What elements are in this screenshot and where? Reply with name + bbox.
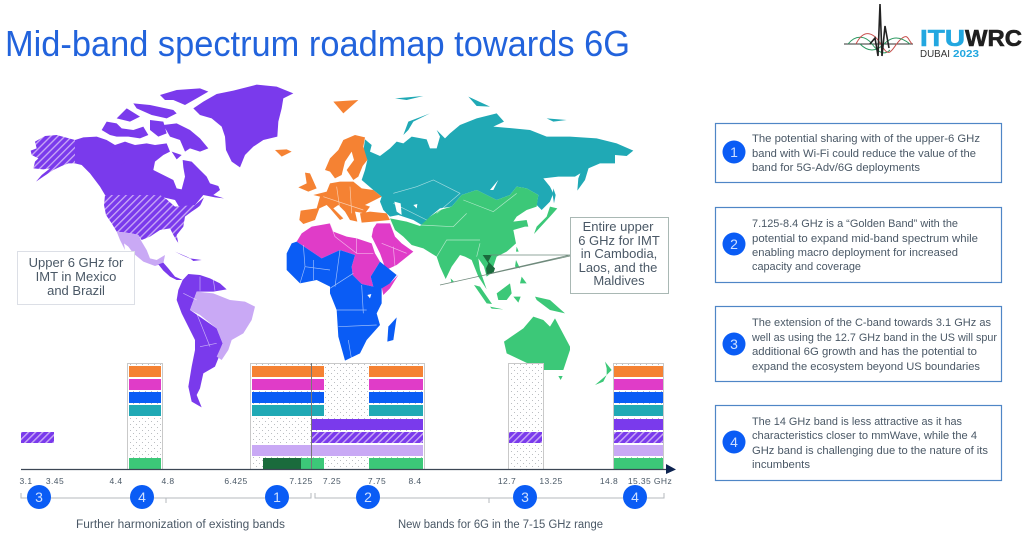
panel: note 2: 2	[730, 236, 738, 252]
Europe	[299, 182, 382, 224]
Central America and Caribbean	[158, 252, 202, 280]
callout: Mexico and Brazil: and Brazil	[47, 283, 105, 298]
panel: note 2: 7.125-8.4 GHz is a “Golden Band” with the	[752, 218, 958, 230]
title: Mid-band spectrum roadmap towards 6G	[5, 23, 630, 64]
spectrum chart	[19, 363, 676, 531]
Greenland	[193, 85, 293, 167]
panel: note 4: 4	[730, 434, 738, 450]
number badges	[27, 485, 647, 509]
range captions	[76, 519, 603, 531]
brackets	[21, 493, 664, 503]
world map: Americas	[31, 85, 293, 407]
panel: note 1: The potential sharing with of the upper-6 GHz	[752, 133, 980, 145]
callout: Mexico and Brazil: Upper 6 GHz for	[29, 255, 124, 270]
logo: ITU WRC Dubai 2023: DUBAI	[920, 49, 950, 60]
frequency labels: 3.45	[46, 476, 64, 486]
world map: Eurasia, Africa, Oceania	[275, 96, 633, 370]
panel: note 1: band with Wi-Fi could reduce the value of the	[752, 148, 976, 160]
number badges: 3	[35, 489, 43, 505]
panel: note 4: incumbents	[752, 459, 811, 471]
frequency labels: 14.8	[600, 476, 618, 486]
band 14.8-15.35	[614, 366, 663, 469]
callout: Cambodia, Laos, Maldives: Maldives	[593, 273, 645, 288]
frequency labels: 13.25	[539, 476, 563, 486]
band 6.425-7.125	[252, 366, 324, 469]
Mexico	[117, 232, 165, 266]
China and South Asia	[390, 187, 538, 289]
number badges: 2	[364, 489, 372, 505]
panel: note 4: The 14 GHz band is less attractive as it has	[752, 416, 962, 428]
callout: Cambodia, Laos, Maldives: in Cambodia,	[581, 246, 657, 261]
frequency labels: 12.7	[498, 476, 516, 486]
callout: Mexico and Brazil	[18, 252, 134, 304]
logo: ITU WRC Dubai 2023: 2023	[953, 49, 980, 60]
callout: Cambodia, Laos, Maldives: Laos, and the	[579, 260, 657, 275]
Brazil	[190, 292, 255, 360]
logo: ITU WRC Dubai 2023	[844, 4, 1022, 60]
Arctic islands	[102, 88, 208, 166]
frequency labels: 8.4	[408, 476, 422, 486]
Japan and islands	[451, 207, 565, 313]
frequency labels: 4.8	[161, 476, 175, 486]
number badges: 3	[521, 489, 529, 505]
panel: note 2: capacity and coverage	[752, 261, 861, 273]
Canada	[75, 137, 224, 208]
country borders	[300, 180, 517, 360]
panel: note 1: band for 5G-Adv/6G deployments	[752, 162, 921, 174]
long bands 7.125-8.4	[252, 419, 423, 456]
callout: Mexico and Brazil: IMT in Mexico	[36, 269, 116, 284]
Caspian and lakes	[367, 180, 498, 298]
panel: note 3: additional 6G growth and has the potential to	[752, 346, 977, 358]
logo: ITU WRC Dubai 2023: WRC	[965, 25, 1022, 51]
axis arrow	[21, 464, 676, 474]
South America borders	[183, 277, 217, 347]
Australia	[504, 317, 570, 370]
panel: note 3: 3	[730, 336, 738, 352]
panel: note 3: The extension of the C-band towards 3.1 GHz as	[752, 317, 991, 329]
panel: note 2	[716, 208, 1002, 282]
panel: note 1	[716, 124, 1002, 182]
North Africa and Middle East	[297, 223, 380, 287]
band 4.4-4.8	[129, 366, 161, 469]
frequency labels: 4.4	[109, 476, 123, 486]
panel: note 2: potential to expand mid-band spectrum while	[752, 233, 978, 245]
band 3.1-3.45	[21, 432, 54, 443]
frequency labels: 3.1	[19, 476, 33, 486]
Iceland	[275, 149, 292, 157]
number badges: 4	[631, 489, 639, 505]
range captions: Further harmonization of existing bands	[76, 519, 285, 531]
callout: Cambodia, Laos, Maldives: 6 GHz for IMT	[578, 233, 660, 248]
number badges: 4	[138, 489, 146, 505]
band 7.75-8.4	[369, 366, 423, 469]
frequency labels: 7.25	[323, 476, 341, 486]
Africa	[287, 242, 397, 361]
New Zealand and Tasmania	[558, 362, 612, 385]
logo: ITU WRC Dubai 2023: ITU	[920, 25, 965, 51]
callout: Cambodia, Laos, Maldives: Entire upper	[583, 219, 654, 234]
panel: note 3: expand the ecosystem beyond US boundaries	[752, 361, 980, 373]
USA	[104, 195, 204, 243]
band 12.7-13.25	[509, 432, 542, 443]
panel: note 3	[716, 306, 1002, 382]
panel: note 1: 1	[730, 144, 738, 160]
South America	[177, 274, 227, 407]
Southeast Asia dark green	[483, 255, 495, 274]
panel: note 2: enabling macro deployment for increased	[752, 247, 958, 259]
frequency labels: 15.35 GHz	[628, 476, 672, 486]
frequency labels: 7.75	[368, 476, 386, 486]
frequency labels: 6.425	[224, 476, 248, 486]
frequency labels	[19, 476, 672, 486]
panel: note 4	[716, 406, 1002, 480]
panel: note 4: GHz band is challenging due to the nature of its	[752, 445, 989, 457]
panel: note 3: well as using the 12.7 GHz band in the US will spur	[751, 332, 997, 344]
dotted band columns	[128, 364, 664, 470]
panel: note 4: characteristics closer to mmWave, while the 4	[752, 430, 977, 442]
callout: Cambodia, Laos, Maldives	[440, 218, 668, 294]
Alaska	[31, 135, 75, 182]
range captions: New bands for 6G in the 7-15 GHz range	[398, 519, 603, 531]
Russia and Central Asia	[362, 113, 633, 225]
frequency labels: 7.125	[289, 476, 313, 486]
number badges: 1	[273, 489, 281, 505]
